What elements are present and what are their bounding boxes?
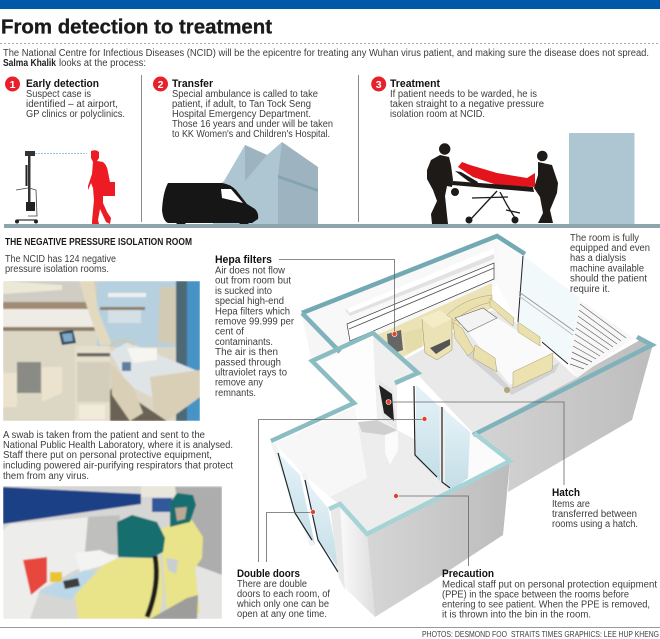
callout: precaution: entering to see patient. When the PPE is removed, [442, 600, 650, 610]
icon: cart and dialysis machine [403, 310, 452, 360]
icon: pass-through hatch [378, 380, 397, 430]
step 1 number badge [5, 76, 20, 92]
callout: double doors: There are double [237, 579, 308, 590]
callout: hatch: Hatch [552, 487, 580, 499]
step 2 number badge: 2 [158, 79, 164, 91]
callout: hepa filters: remove any [215, 378, 263, 389]
step 2: transfer [153, 76, 333, 226]
callout: double doors: Double doors [237, 568, 300, 580]
callout: hatch: transferred between [552, 509, 637, 520]
callout: hatch: Items are [552, 499, 591, 510]
photo: hospital isolation room [3, 281, 200, 421]
step 3 text [390, 78, 545, 120]
callout: precaution: Medical staff put on personal protection equipment [442, 580, 657, 590]
callout: hatch: rooms using a hatch. [552, 519, 638, 530]
callout: hepa filters: passed through [215, 357, 281, 368]
step 3 text: If patient needs to be warded, he is [390, 89, 537, 100]
icon: bed [447, 295, 560, 395]
callout: hepa filters: ultraviolet rays to [215, 368, 288, 378]
callout: double doors: which only one can be [236, 599, 330, 610]
text: number of rooms [5, 254, 116, 275]
leader line: hepa filters [279, 260, 394, 333]
callout: hepa filters: special high-end [215, 296, 284, 307]
callout: hepa filters: is sucked into [215, 286, 273, 297]
step 1: early detection [5, 76, 125, 224]
leader line: entrance door [266, 512, 313, 562]
step 3 number badge: 3 [376, 79, 382, 91]
step 1 text: Early detection [26, 78, 99, 90]
icon: temperature scanner kiosk [15, 151, 38, 224]
scanner beam [35, 152, 87, 154]
intro text: The National Centre for Infectious Diseases (NCID) will be the epicentre for treating any Wuhan virus patient, and making sure the disease does not spread. [3, 48, 649, 59]
floors [330, 310, 577, 533]
icon: isolation room block [569, 133, 634, 225]
callout: precaution: Precaution [442, 568, 494, 580]
isolation room floor plan [270, 235, 653, 617]
text: number of rooms: The NCID has 124 negative [5, 254, 116, 265]
callout: double doors: open at any one time. [237, 609, 327, 620]
ground strip [4, 224, 660, 228]
step 2 number badge [153, 76, 168, 92]
intro text: Salma Khalik [3, 58, 56, 69]
callout: room equipment: has a dialysis [570, 253, 626, 264]
text: swab description: Staff there put on personal protective equipment, [3, 450, 212, 461]
step 2 text: to KK Women's and Children's Hospital. [172, 129, 330, 140]
leader line: inner door [258, 420, 424, 562]
callout: room equipment: equipped and even [570, 243, 650, 254]
step 1 text: identified – at airport, [26, 99, 118, 110]
top colour bar [0, 0, 660, 9]
text: swab description: National Public Health Laboratory, where it is analysed. [3, 440, 233, 451]
inner glass doors [414, 385, 470, 490]
icon: ambulance van [162, 183, 258, 226]
callout: hepa filters: Air does not flow [215, 266, 286, 276]
callout: hepa filters: remnants. [215, 388, 256, 399]
icon: red walking person with briefcase [88, 150, 115, 224]
step 3 number badge [371, 76, 386, 92]
text: swab description [3, 430, 233, 482]
step 1 text: GP clinics or polyclinics. [26, 109, 125, 120]
step 1 text: Suspect case is [26, 89, 91, 100]
step 2 text: Transfer [172, 78, 214, 90]
intro text [3, 48, 649, 69]
inner ante-room walls [275, 316, 418, 497]
callout: hatch [552, 487, 638, 530]
step 2 text: Special ambulance is called to take [172, 89, 319, 100]
callout: hepa filters [215, 254, 295, 399]
callout: hepa filters: Hepa filters which [215, 306, 290, 317]
icon: hepa filter unit [387, 330, 403, 353]
callout: precaution: it is thrown into the bin in the room. [442, 610, 591, 620]
callout: precaution: (PPE) in the space between the rooms before [442, 590, 630, 600]
text: swab description: A swab is taken from the patient and sent to the [3, 430, 206, 441]
entrance double doors [270, 442, 345, 590]
step 1 text [26, 78, 125, 120]
leader line: hatch [389, 402, 564, 485]
callout: double doors: doors to each room, of [237, 589, 330, 600]
photo: laboratory staff in protective equipment [3, 486, 222, 619]
step 2 text [172, 78, 333, 140]
leader line: precaution [396, 496, 468, 566]
callout: hepa filters: cent of [215, 327, 244, 338]
callout: hepa filters: Hepa filters [215, 254, 272, 266]
callout: hepa filters: remove 99.999 per [215, 316, 295, 328]
callout: double doors [236, 568, 330, 620]
text: swab description: including powered air-purifying respirators that protect [3, 460, 233, 472]
callout: room equipment [570, 233, 650, 295]
title: From detection to treatment [1, 16, 272, 38]
divider [358, 75, 360, 222]
step 1 number badge: 1 [10, 79, 16, 91]
callout: precaution [442, 568, 657, 620]
step 3 text: Treatment [390, 78, 440, 90]
intro text: looks at the process: [59, 58, 146, 69]
callout: hepa filters: contaminants. [215, 337, 273, 348]
step 3 text: isolation room at NCID. [390, 109, 485, 120]
step 3 text: taken straight to a negative pressure [390, 99, 545, 110]
callout: room equipment: The room is fully [570, 233, 639, 244]
step 2 text: patient, if adult, to Tan Tock Seng [172, 99, 311, 110]
callout: room equipment: machine available [570, 264, 645, 274]
callout: room equipment: should the patient [570, 274, 647, 284]
callout: hepa filters: out from room but [215, 276, 291, 287]
icon: medics pushing stretcher with patient [427, 143, 558, 224]
teal wall tops [271, 236, 652, 534]
text: number of rooms: pressure isolation rooms. [5, 264, 109, 275]
marker dots [310, 332, 427, 514]
back wall with rail and cream panel [302, 235, 497, 365]
icon: hospital building [213, 142, 318, 225]
divider [140, 75, 142, 222]
step 2 text: Those 16 years and under will be taken [172, 119, 333, 130]
right wall with window and blinds [497, 235, 633, 378]
step 3: treatment [371, 76, 634, 225]
photo and graphics credits [422, 629, 659, 639]
section heading: THE NEGATIVE PRESSURE ISOLATION ROOM [5, 237, 192, 248]
photo and graphics credits: PHOTOS: DESMOND FOO [422, 629, 507, 639]
callout: room equipment: require it. [570, 284, 610, 295]
callout: hepa filters: The air is then [215, 347, 278, 358]
step 2 text: Hospital Emergency Department. [172, 109, 311, 120]
text: swab description: them from any virus. [3, 471, 89, 482]
exterior walls [340, 340, 653, 617]
